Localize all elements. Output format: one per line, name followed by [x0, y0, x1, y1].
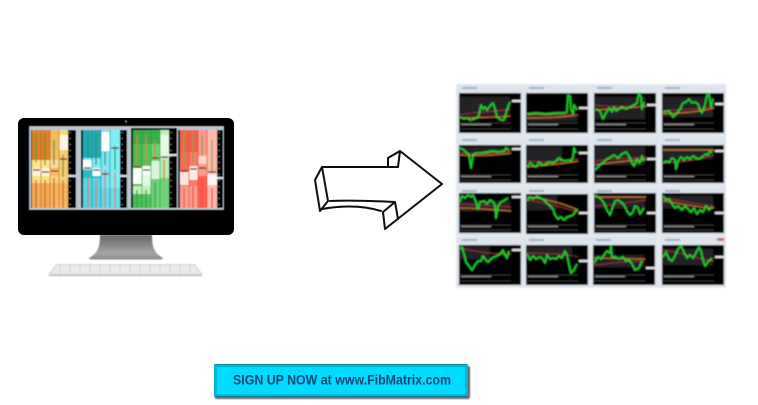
monitor stand [89, 235, 163, 260]
chart 7 [592, 137, 658, 185]
chart 9 [457, 188, 523, 235]
chart 6 [524, 137, 590, 185]
monitor bezel [18, 118, 234, 235]
panel: green ladder [131, 128, 177, 208]
chart 4 [660, 85, 726, 135]
button shadow [215, 366, 470, 399]
chart 13 [457, 237, 523, 287]
button body [214, 364, 468, 397]
chart 2 [524, 85, 590, 135]
chart 16 [660, 237, 726, 287]
button label: SIGN UP NOW at www.FibMatrix.com [233, 372, 451, 388]
chart 10 [524, 188, 590, 235]
collage background [456, 84, 726, 288]
chart 11 [592, 188, 658, 235]
panel: orange ladder [31, 130, 76, 208]
chart collage [456, 84, 726, 288]
chart 5 [457, 137, 523, 185]
chart 1 [457, 85, 523, 135]
arrow [315, 151, 442, 229]
monitor screen with four ladder panels [29, 126, 224, 210]
monitor illustration [18, 118, 234, 276]
sign up button [214, 364, 470, 399]
chart 15 [591, 237, 657, 287]
keyboard [48, 264, 203, 276]
panel: red ladder [178, 130, 223, 208]
chart 3 [592, 85, 658, 135]
chart 14 [524, 237, 590, 287]
chart 12 [660, 188, 726, 235]
chart 8 [660, 137, 726, 185]
panel: blue ladder [81, 130, 127, 208]
webcam [125, 120, 127, 123]
